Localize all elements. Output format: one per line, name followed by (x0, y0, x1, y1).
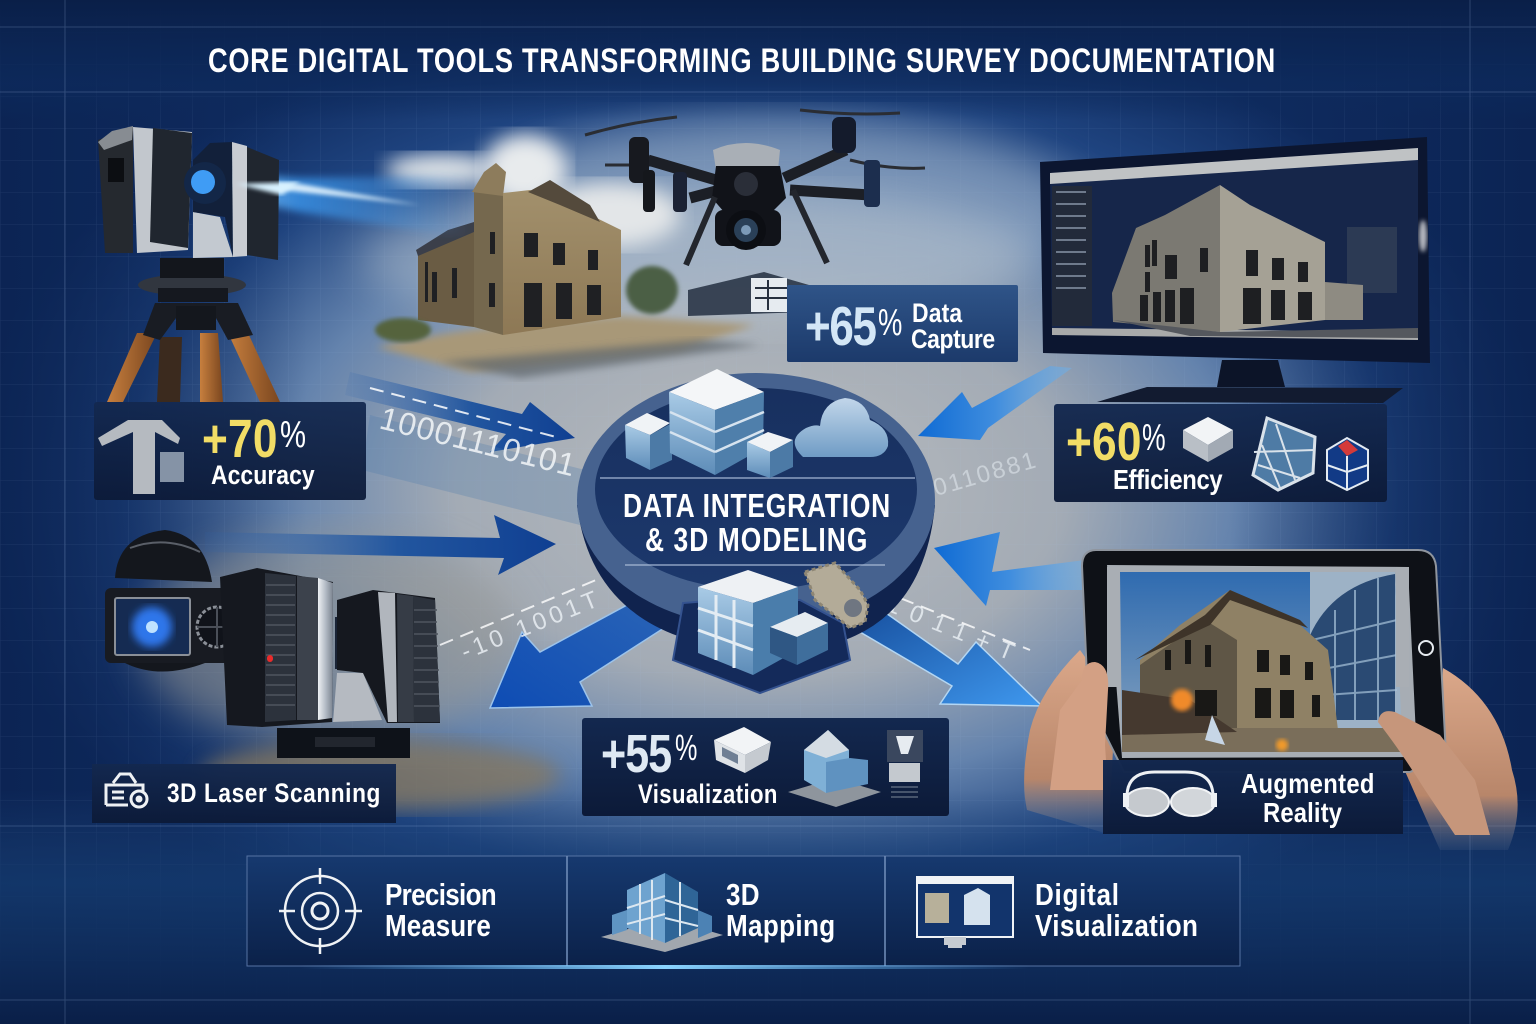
feature: 3D Mapping: Mapping (726, 909, 835, 944)
label: +60% Efficiency: +60 (1066, 412, 1141, 472)
icon: mini building (751, 278, 787, 312)
icon: data cubes and cloud (625, 369, 888, 478)
label: +65% Data Capture: Capture (911, 324, 995, 354)
icon: 3D building on map (601, 873, 723, 952)
label: +70% Accuracy: +70 (202, 409, 277, 469)
feature: 3D Mapping: 3D (726, 878, 760, 913)
binary data streams: -10 1001T (457, 586, 602, 666)
label: 3D Laser Scanning (92, 764, 396, 823)
arrow: laser scanner to hub (205, 515, 556, 575)
icon: scanner glyph (106, 774, 147, 807)
bottom bar (247, 856, 1240, 969)
icon: tablet with AR view and hands (1024, 550, 1518, 850)
label: +70% Accuracy (94, 402, 366, 500)
label: +70% Accuracy: % (280, 413, 306, 456)
label: +70% Accuracy: Accuracy (211, 460, 315, 490)
arrow: hub to augmented reality (860, 606, 1042, 706)
title: CORE DIGITAL TOOLS TRANSFORMING BUILDING SURVEY DOCUMENTATION (208, 41, 1275, 80)
hub heading: DATA INTEGRATION (623, 488, 890, 525)
feature: Precision Measure (279, 868, 497, 954)
icon: drone (585, 110, 925, 265)
label: Augmented Reality: Augmented (1241, 767, 1374, 799)
label: +65% Data Capture (751, 278, 1018, 362)
feature: Precision Measure: Measure (385, 909, 491, 944)
label: Augmented Reality: Reality (1263, 796, 1343, 828)
icon: city model (788, 730, 881, 807)
photo: heritage building (375, 134, 809, 378)
icon: equipment (887, 730, 923, 797)
icon: measuring tool (98, 420, 184, 494)
icon: red and blue cube (1327, 438, 1368, 490)
label: 3D Laser Scanning: 3D Laser Scanning (167, 778, 380, 808)
binary data streams: 10001110101 (376, 400, 579, 483)
arrow: monitor to hub (918, 366, 1072, 440)
label: +55% Visualization: +55 (601, 725, 672, 784)
label: +60% Efficiency: % (1142, 415, 1166, 458)
central hub (577, 369, 935, 693)
label: +60% Efficiency (1054, 404, 1387, 502)
binary data streams: 0110881 (930, 447, 1039, 502)
hub heading: & 3D MODELING (645, 522, 867, 559)
label: +65% Data Capture: Data (912, 298, 963, 328)
feature: 3D Mapping (601, 873, 835, 952)
icon: laser beam (205, 172, 470, 238)
label: +65% Data Capture: +65 (805, 295, 877, 357)
icon: white cube (1183, 417, 1233, 462)
label: +55% Visualization (582, 718, 949, 816)
icon: display (917, 877, 1013, 948)
icon: building model and gear (698, 563, 868, 675)
feature: Precision Measure: Precision (385, 878, 497, 913)
label: +60% Efficiency: Efficiency (1113, 463, 1223, 495)
icon: target (279, 868, 362, 954)
icon: monitor (1040, 137, 1430, 403)
feature: Digital Visualization: Digital (1035, 878, 1119, 913)
hub heading (623, 488, 890, 559)
label: +55% Visualization: % (675, 728, 697, 768)
label: Augmented Reality (1103, 760, 1403, 834)
arrow: scanner to hub (345, 372, 575, 452)
arrow: hub to visualization (490, 598, 664, 708)
label: +65% Data Capture: % (878, 302, 902, 344)
binary data streams (362, 400, 1039, 666)
icon: glass panel (1253, 418, 1315, 490)
feature: Digital Visualization: Visualization (1035, 909, 1198, 944)
icon: device (714, 727, 771, 773)
icon: AR goggles (1123, 772, 1217, 816)
feature: Digital Visualization (917, 877, 1198, 948)
icon: laser scanner on tripod (98, 126, 300, 402)
icon: 3D laser scanner camera (105, 530, 440, 758)
binary data streams: 1011+T (883, 591, 1018, 666)
label: +55% Visualization: Visualization (638, 780, 777, 810)
arrow: tablet to hub (934, 532, 1085, 606)
